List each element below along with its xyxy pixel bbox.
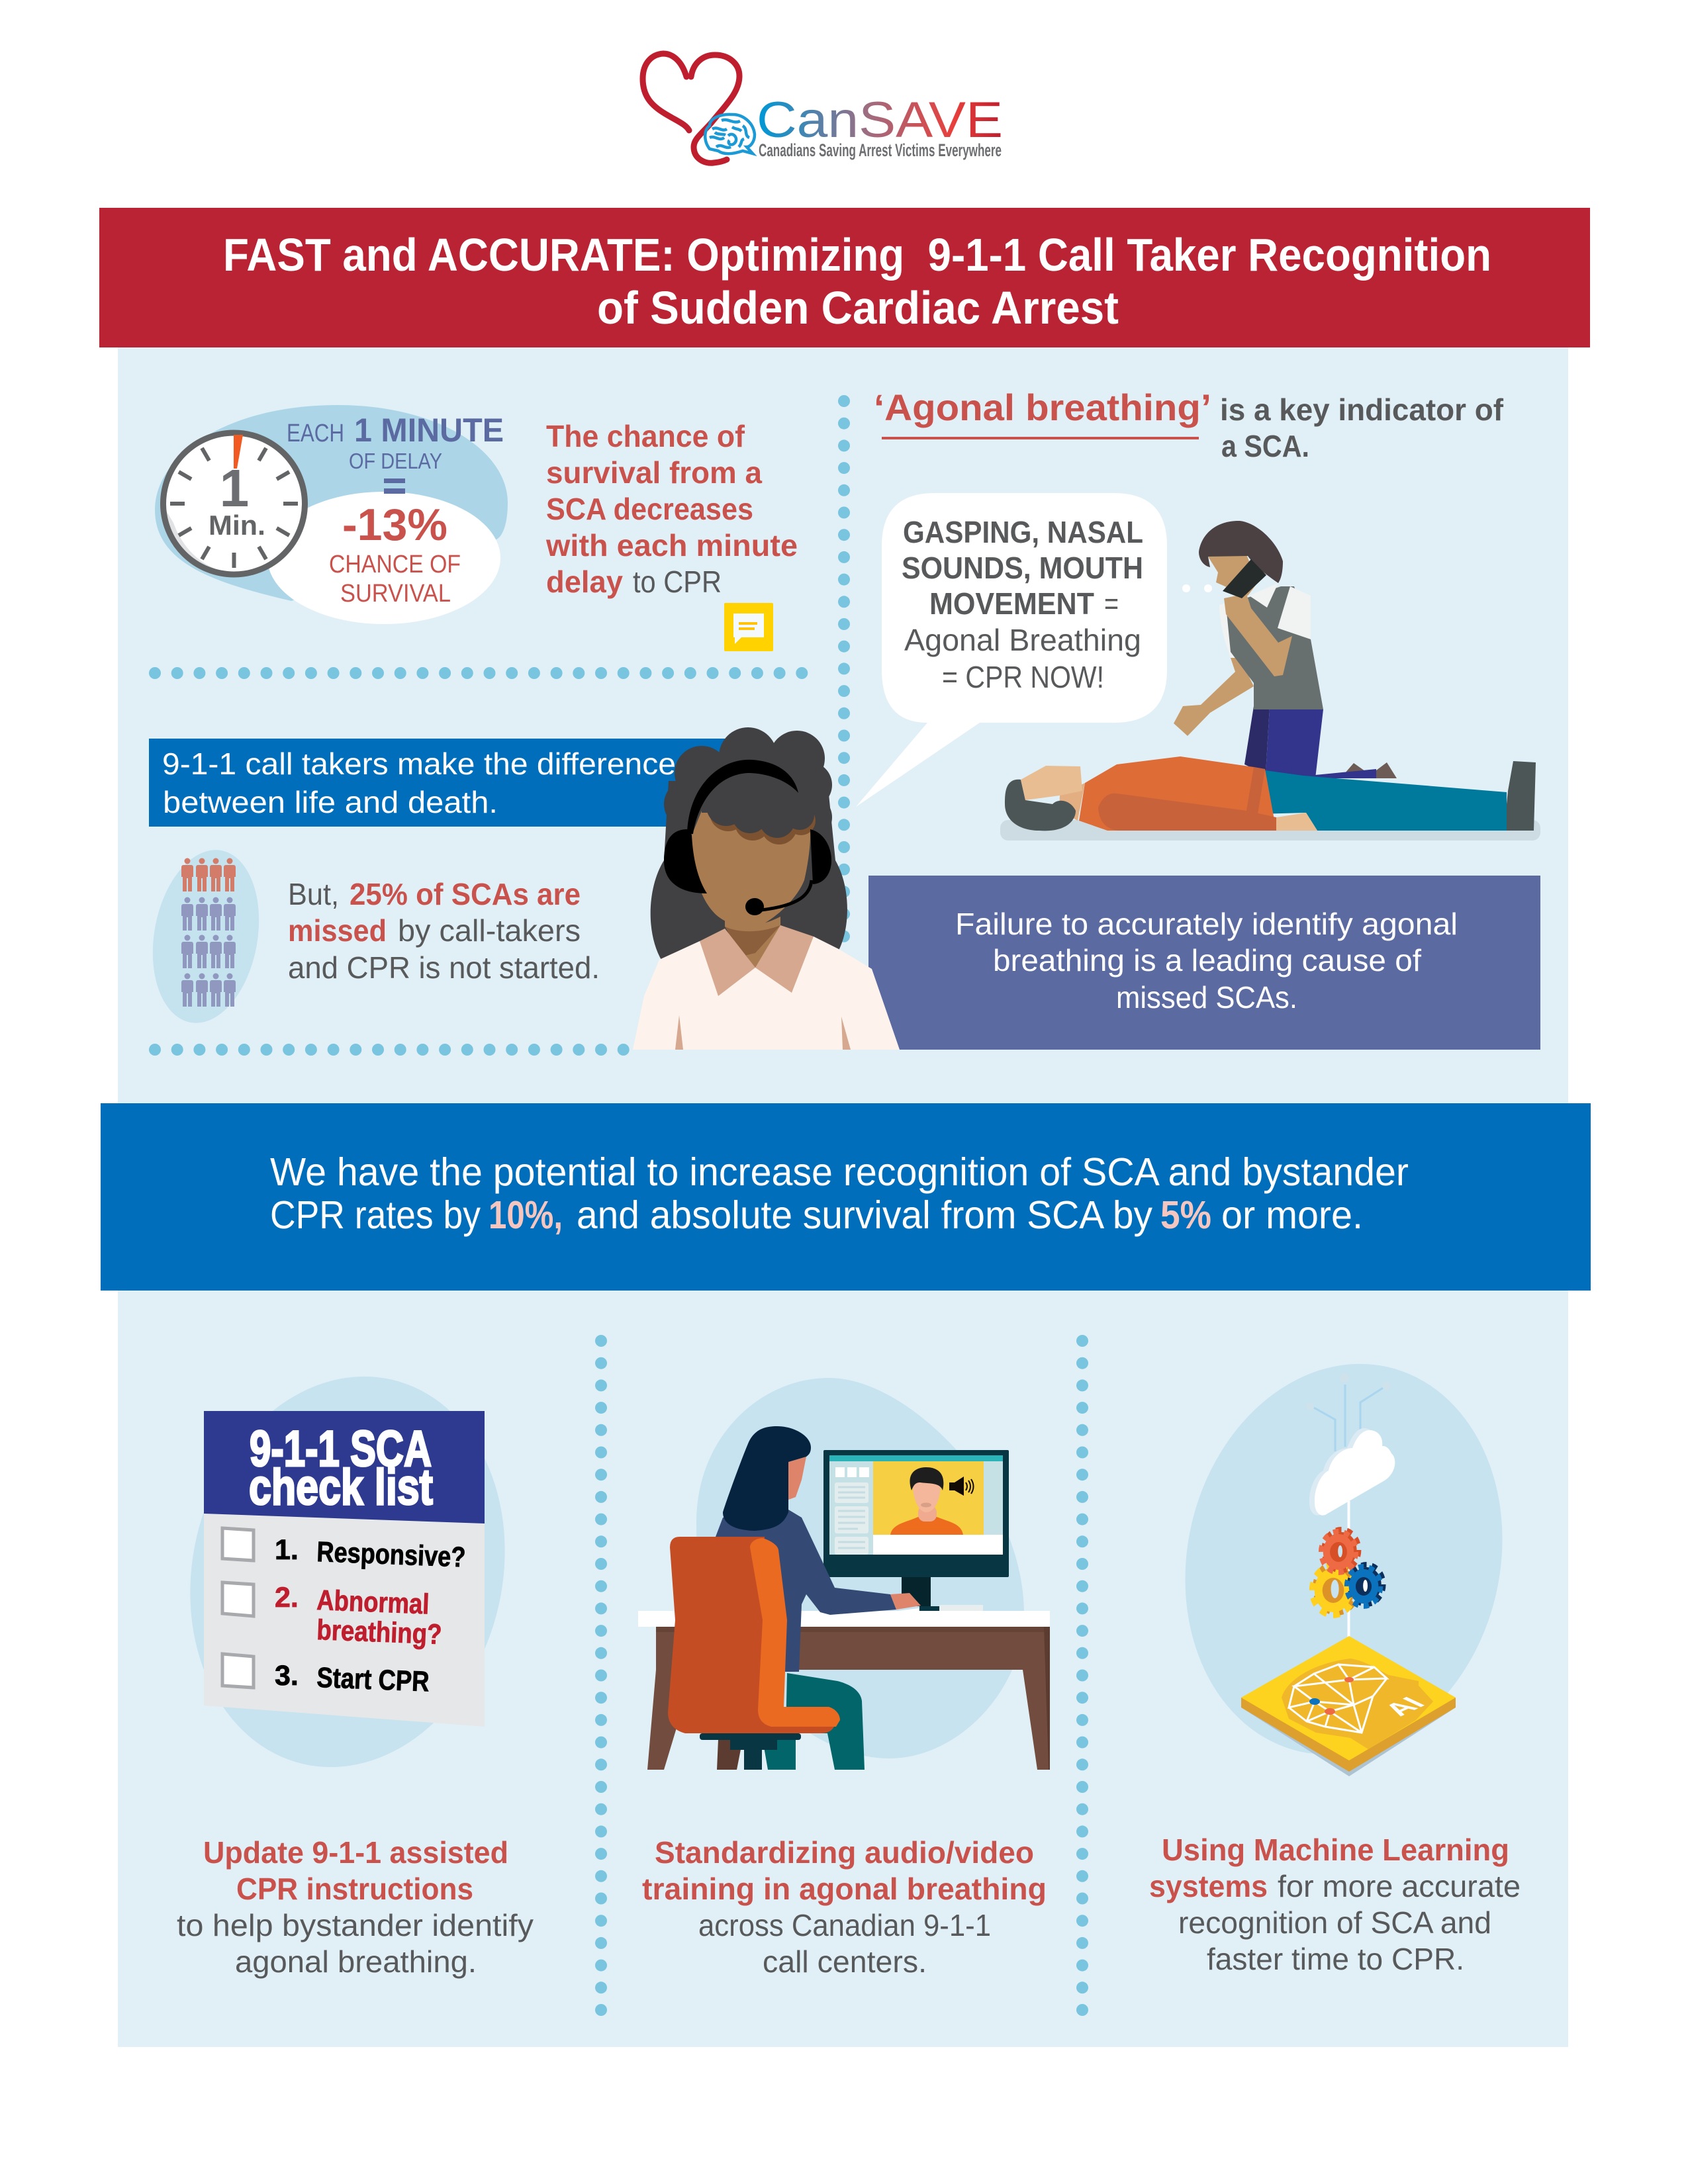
text: 25 percent missed: missed [288,913,387,948]
text: survival decreases: with each minute [545,528,798,563]
panel: delay statistic blob: 1 MINUTE [354,412,504,449]
chart: people pictogram 25 percent [140,841,272,1032]
panel: delay statistic blob: CHANCE OF [329,551,461,578]
panel: delay statistic blob: OF DELAY [349,449,442,473]
panel: failure callout [868,876,1540,1050]
text: standardizing training [642,1835,1047,1979]
speech bubble: MOVEMENT [929,586,1094,621]
banner: potential increase: We have the potential to increase recognition of SCA and bystander [270,1150,1409,1194]
heading: agonal breathing: ‘Agonal breathing’ [874,387,1211,428]
icon: clock [163,432,306,575]
desk [638,1611,1050,1770]
banner: potential increase: CPR rates by [270,1193,481,1237]
icon: brain [705,114,755,154]
list items: 3. [275,1660,299,1692]
list items [275,1534,466,1698]
text: update instructions [177,1835,534,1979]
text: machine learning: faster time to CPR. [1207,1942,1464,1976]
banner: potential increase: and absolute survival from SCA by [577,1193,1152,1237]
illustration: woman on phone kneeling [1174,521,1397,778]
callout: call takers: 9-1-1 call takers make the difference [162,747,676,781]
callout: call takers [149,739,731,827]
text: survival decreases: to CPR [633,565,722,599]
panel: delay statistic blob: EACH [287,420,344,447]
title banner: of Sudden Cardiac Arrest [597,282,1119,334]
list items: Abnormal [316,1584,430,1621]
text: machine learning [1149,1833,1521,1976]
icon: yellow note [724,603,773,651]
list items: Responsive? [316,1536,466,1574]
panel: delay statistic blob: -13% [342,500,447,550]
neural network lines [1289,1664,1387,1733]
icon: clock: 1 [220,459,249,518]
list items: 1. [275,1534,299,1566]
text: standardizing training: across Canadian 9-1-1 [698,1908,991,1942]
panel: delay statistic blob [155,405,508,624]
checkboxes [222,1528,254,1688]
speech bubble: = [1104,586,1119,621]
text: survival decreases: survival from a [546,455,762,490]
panel: failure callout: Failure to accurately identify agonal [955,907,1458,941]
speech bubble: = CPR NOW! [942,660,1104,694]
speech bubble: SOUNDS, MOUTH [902,551,1143,585]
text: survival decreases: SCA decreases [546,492,753,526]
text: standardizing training: training in agonal breathing [642,1872,1047,1906]
banner: potential increase [101,1103,1591,1291]
icon: speaker [949,1477,973,1496]
text: machine learning: systems [1149,1869,1268,1903]
list items: 2. [275,1582,299,1614]
platform [1241,1636,1456,1776]
text: 25 percent missed: 25% of SCAs are [350,877,581,911]
text: standardizing training: call centers. [763,1944,927,1979]
illustration: SCA check list: 9-1-1 SCA [250,1421,432,1477]
icon: cloud [1309,1428,1395,1516]
video presenter [890,1467,963,1535]
text: survival decreases: The chance of [546,419,745,453]
text: 25 percent missed [288,877,600,985]
illustration: call taker with headset [633,727,900,1050]
speech bubble [856,493,1212,807]
text: standardizing training: Standardizing audio/video [655,1835,1034,1870]
text: 25 percent missed: by call-takers [398,913,581,948]
text: 25 percent missed: and CPR is not started. [288,950,600,985]
text: update instructions: Update 9-1-1 assisted [203,1835,508,1870]
panel: failure callout: breathing is a leading cause of [993,943,1421,978]
callout: call takers: between life and death. [163,785,498,819]
illustration: machine learning AI platform [1147,1332,1540,1786]
banner: potential increase: 5% [1160,1193,1211,1237]
heading: agonal breathing: a SCA. [1221,429,1309,463]
circuit lines [1306,1373,1390,1451]
heading: agonal breathing: is a key indicator of [1220,392,1504,427]
banner: potential increase: 10%, [489,1193,563,1237]
icon: clock: Min. [209,510,265,541]
panel: light blue background [118,347,1568,2047]
text: update instructions: CPR instructions [236,1872,473,1906]
seated woman [716,1426,921,1770]
logo wordmark: CanSAVE [757,92,1003,148]
icon: headset [664,760,831,915]
illustration: training at computer [638,1378,1050,1770]
office chair [668,1537,840,1770]
text: 25 percent missed: But, [288,877,339,911]
title banner: FAST and ACCURATE: Optimizing 9-1-1 Call Taker Recognition [223,229,1491,281]
speech bubble: Agonal Breathing [904,623,1141,657]
icon: gears [1312,1529,1383,1615]
text: update instructions: to help bystander identify [177,1908,534,1942]
text: machine learning: recognition of SCA and [1178,1905,1491,1940]
platform: AI [1377,1694,1432,1719]
logo: CanSAVE [643,54,1003,163]
heading: agonal breathing [874,387,1504,463]
text: survival decreases [545,419,798,599]
text: machine learning: for more accurate [1278,1869,1521,1903]
illustration: man lying on the ground [1000,756,1540,841]
list items: breathing? [316,1614,442,1651]
text: machine learning: Using Machine Learning [1162,1833,1509,1867]
illustration: SCA check list: check list [249,1459,433,1516]
logo tagline: Canadians Saving Arrest Victims Everywhere [759,140,1002,160]
list items: Start CPR [316,1662,430,1698]
panel: delay statistic blob: SURVIVAL [340,580,451,608]
icon: heart [643,54,739,163]
illustration: SCA check list [152,1345,543,1799]
text: survival decreases: delay [546,565,623,599]
title banner [99,208,1590,347]
text: update instructions: agonal breathing. [235,1944,477,1979]
monitor [823,1450,1009,1612]
speech bubble: GASPING, NASAL [903,515,1143,549]
panel: failure callout: missed SCAs. [1116,980,1297,1015]
banner: potential increase: or more. [1221,1193,1363,1237]
